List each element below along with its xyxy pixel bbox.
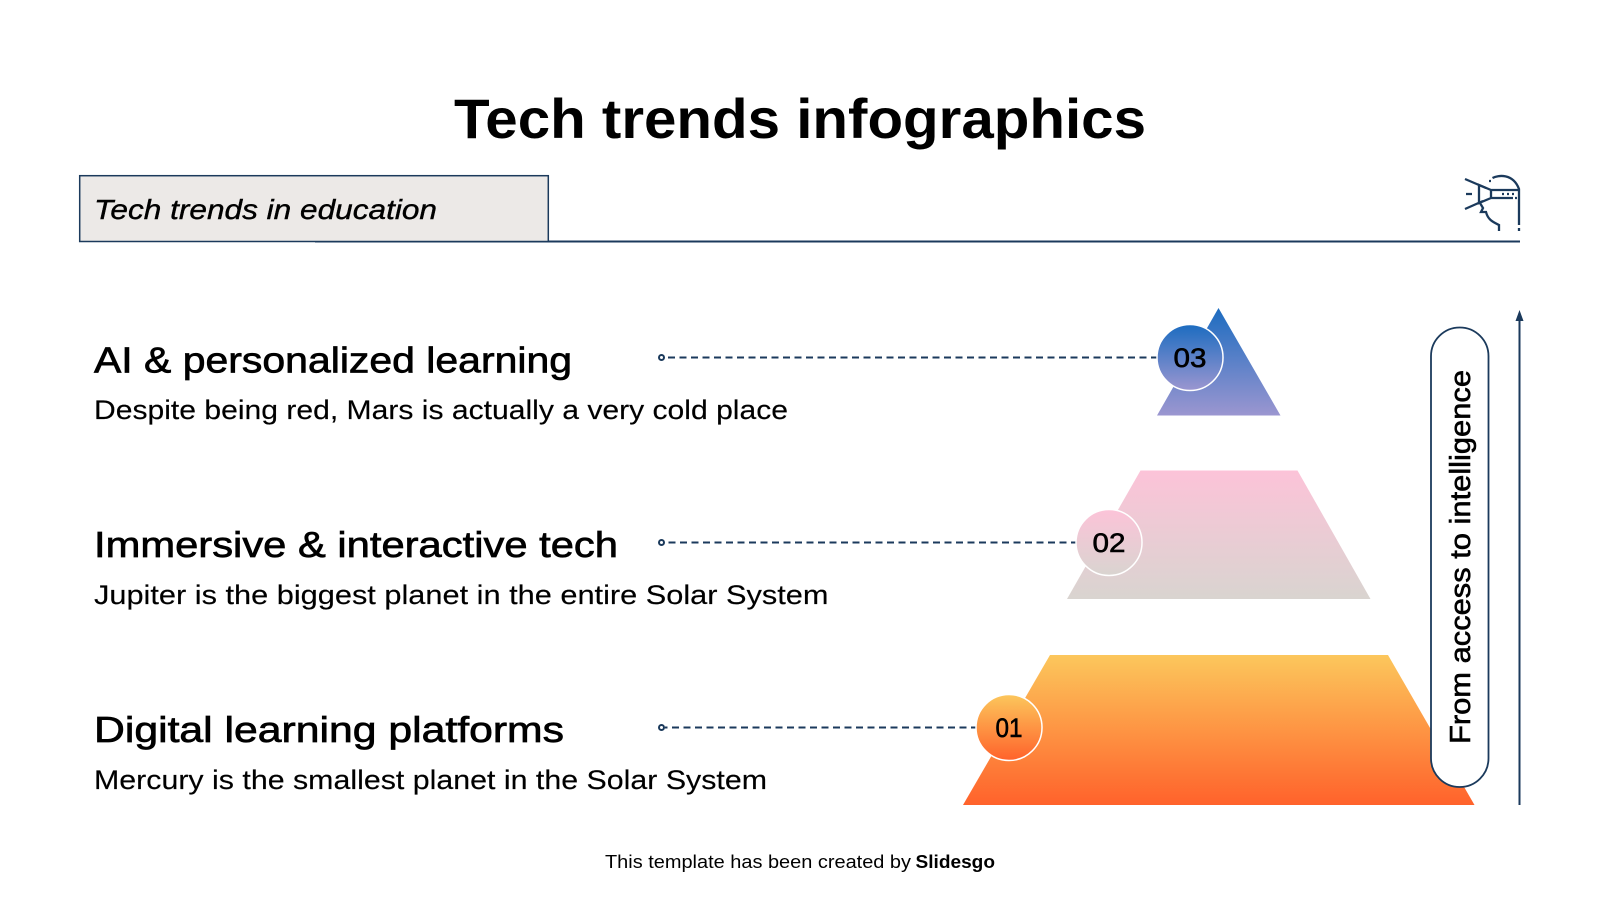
badge 02: [1076, 510, 1142, 576]
row 02: immersive and interactive tech: [94, 524, 828, 610]
heading 01: Digital learning platforms: [94, 709, 564, 750]
heading 02: Immersive & interactive tech: [94, 524, 618, 565]
description 01: Mercury is the smallest planet in the Solar System: [94, 765, 767, 795]
title: Tech trends infographics: [454, 87, 1146, 150]
badge 03: [1157, 324, 1223, 390]
heading 03: AI & personalized learning: [94, 340, 572, 380]
badge 01: [976, 694, 1042, 760]
pyramid tier 02: [1067, 470, 1370, 599]
arrow: upward progression: [1516, 310, 1524, 805]
header rule: [315, 240, 1520, 242]
subtitle box: Tech trends in education: [94, 194, 437, 225]
badge 02: 02: [1092, 528, 1126, 558]
row 03: AI and personalized learning: [94, 340, 788, 425]
pill label: from access to intelligence: From access to intelligence: [1445, 370, 1477, 744]
pyramid tier 01: [963, 655, 1474, 805]
subtitle box: [80, 176, 548, 242]
badge 03: 03: [1174, 343, 1206, 373]
icon: VR headset head: [1465, 176, 1519, 231]
row 01: digital learning platforms: [94, 709, 767, 795]
pill label: from access to intelligence: [1431, 328, 1488, 787]
badge 01: 01: [996, 713, 1022, 743]
connector 02: [659, 540, 1078, 545]
connector 03: [659, 355, 1158, 360]
footer credit: Slidesgo: [916, 851, 995, 872]
description 03: Despite being red, Mars is actually a very cold place: [94, 395, 788, 425]
footer credit: This template has been created by: [605, 851, 912, 872]
description 02: Jupiter is the biggest planet in the entire Solar System: [94, 580, 828, 610]
pyramid tier 03: [1157, 308, 1280, 416]
connector 01: [659, 725, 978, 730]
